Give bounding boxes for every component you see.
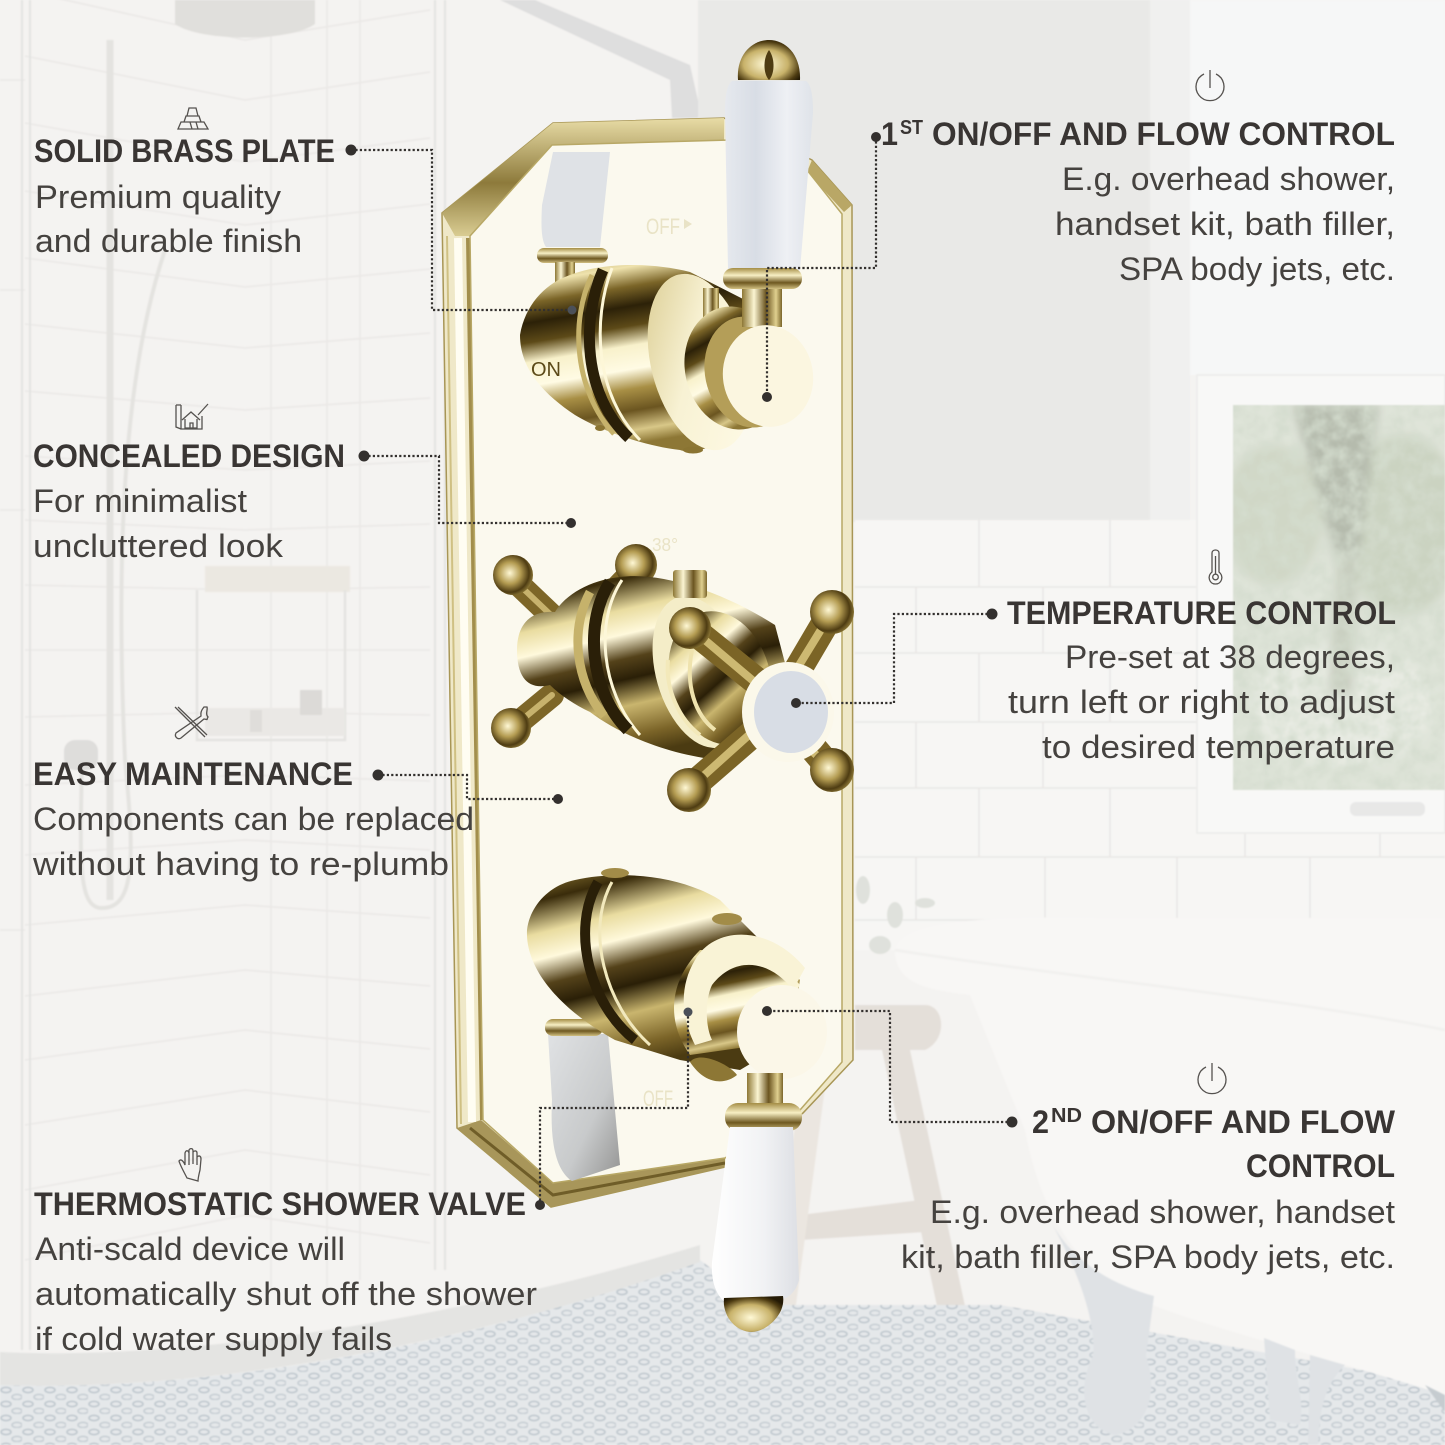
engraved labels: OFF <box>643 1086 673 1111</box>
heading: CONCEALED DESIGN <box>33 438 345 474</box>
icon: crossed wrench and screwdriver <box>175 707 208 739</box>
block: temperature control <box>1007 595 1396 765</box>
heading: SOLID BRASS PLATE <box>34 133 335 169</box>
shower rail and hose <box>81 40 165 908</box>
top valve body <box>520 263 821 461</box>
window frame <box>1197 375 1445 833</box>
block: easy maintenance <box>32 756 474 882</box>
product: brass valve plate <box>442 118 853 1207</box>
description <box>35 1231 537 1357</box>
icon: house blueprint <box>176 404 208 429</box>
leader: temperature control <box>791 608 998 708</box>
description: to desired temperature <box>1042 729 1395 765</box>
bottom valve body <box>527 868 827 1081</box>
icon: power button <box>1196 70 1224 101</box>
heading: 2 <box>1032 1104 1049 1140</box>
front cross handle <box>667 590 854 812</box>
grey wall <box>698 0 1150 522</box>
description: SPA body jets, etc. <box>1119 251 1395 287</box>
window handle <box>1350 802 1425 816</box>
bath feet <box>1051 1222 1445 1445</box>
top valve body: ON <box>531 359 561 381</box>
description: Premium quality <box>35 179 281 215</box>
block: thermostatic shower valve <box>34 1186 537 1357</box>
description: Components can be replaced <box>33 801 474 837</box>
plate left edge strips <box>447 236 482 1124</box>
icon: power button <box>1198 1063 1226 1094</box>
description: without having to re-plumb <box>32 846 449 882</box>
description: handset kit, bath filler, <box>1055 206 1395 242</box>
stool <box>765 1005 968 1350</box>
description <box>32 801 474 882</box>
heading: CONTROL <box>1246 1148 1395 1184</box>
description: turn left or right to adjust <box>1008 684 1395 720</box>
handset <box>64 740 98 770</box>
overhead shower head <box>175 0 315 38</box>
window view with trees <box>1232 404 1445 790</box>
callout leaders <box>346 132 1018 1210</box>
description: For minimalist <box>33 483 247 519</box>
heading <box>1032 1104 1396 1184</box>
plant <box>856 876 935 954</box>
leader: easy maintenance <box>372 770 563 804</box>
heading: THERMOSTATIC SHOWER VALVE <box>34 1186 526 1222</box>
description: uncluttered look <box>33 528 284 564</box>
heading: EASY MAINTENANCE <box>33 756 353 792</box>
engraved labels <box>643 214 692 1111</box>
description <box>901 1194 1395 1275</box>
description: if cold water supply fails <box>35 1321 392 1357</box>
top lever: left reflection <box>537 152 610 284</box>
icon: raised hand <box>179 1149 201 1181</box>
plate face <box>470 140 842 1183</box>
engraved labels: 38° <box>652 535 678 555</box>
centre valve body <box>517 570 854 812</box>
shower tray edge <box>0 1245 700 1386</box>
bottom lever: ceramic handle with gold cap <box>712 1073 802 1332</box>
description: E.g. overhead shower, handset <box>930 1194 1395 1230</box>
description: and durable finish <box>35 223 302 259</box>
heading: ND <box>1051 1105 1082 1127</box>
description: E.g. overhead shower, <box>1062 161 1395 197</box>
centre valve: rear cross handle <box>491 544 657 748</box>
block: solid brass plate <box>34 133 335 259</box>
plate outer bevel <box>442 118 853 1207</box>
leader: concealed design <box>358 450 576 528</box>
top lever: ceramic handle with gold cap <box>723 40 813 289</box>
lower tile wall <box>855 520 1445 950</box>
floor <box>0 1260 1445 1445</box>
leader: second flow control <box>762 1006 1018 1128</box>
description: kit, bath filler, SPA body jets, etc. <box>901 1239 1395 1275</box>
bottom lever: left reflection <box>545 1019 620 1181</box>
leader: solid brass plate <box>346 144 576 314</box>
description: Pre-set at 38 degrees, <box>1065 639 1395 675</box>
block: first on/off and flow control <box>881 116 1395 287</box>
description: Anti-scald device will <box>35 1231 345 1267</box>
block: concealed design <box>33 438 345 564</box>
heading: 1 <box>881 116 898 152</box>
icon: gold bars <box>178 108 208 129</box>
bath tub <box>895 917 1445 1395</box>
shower enclosure tile wall <box>0 0 445 1350</box>
heading: TEMPERATURE CONTROL <box>1007 595 1396 631</box>
description <box>35 179 302 259</box>
heading: ON/OFF AND FLOW CONTROL <box>932 116 1395 152</box>
heading: ST <box>900 117 923 139</box>
description: automatically shut off the shower <box>35 1276 537 1312</box>
glass top rail <box>500 0 702 118</box>
heading: ON/OFF AND FLOW <box>1091 1104 1396 1140</box>
icon: thermometer <box>1209 550 1222 584</box>
corner shelf <box>197 566 350 740</box>
engraved labels: OFF <box>646 214 680 239</box>
description <box>1008 639 1395 765</box>
block: second on/off and flow control <box>901 1104 1396 1275</box>
leader: first flow control <box>762 132 881 402</box>
description <box>33 483 284 564</box>
leader: thermostatic valve <box>535 1008 692 1210</box>
description <box>1055 161 1395 287</box>
